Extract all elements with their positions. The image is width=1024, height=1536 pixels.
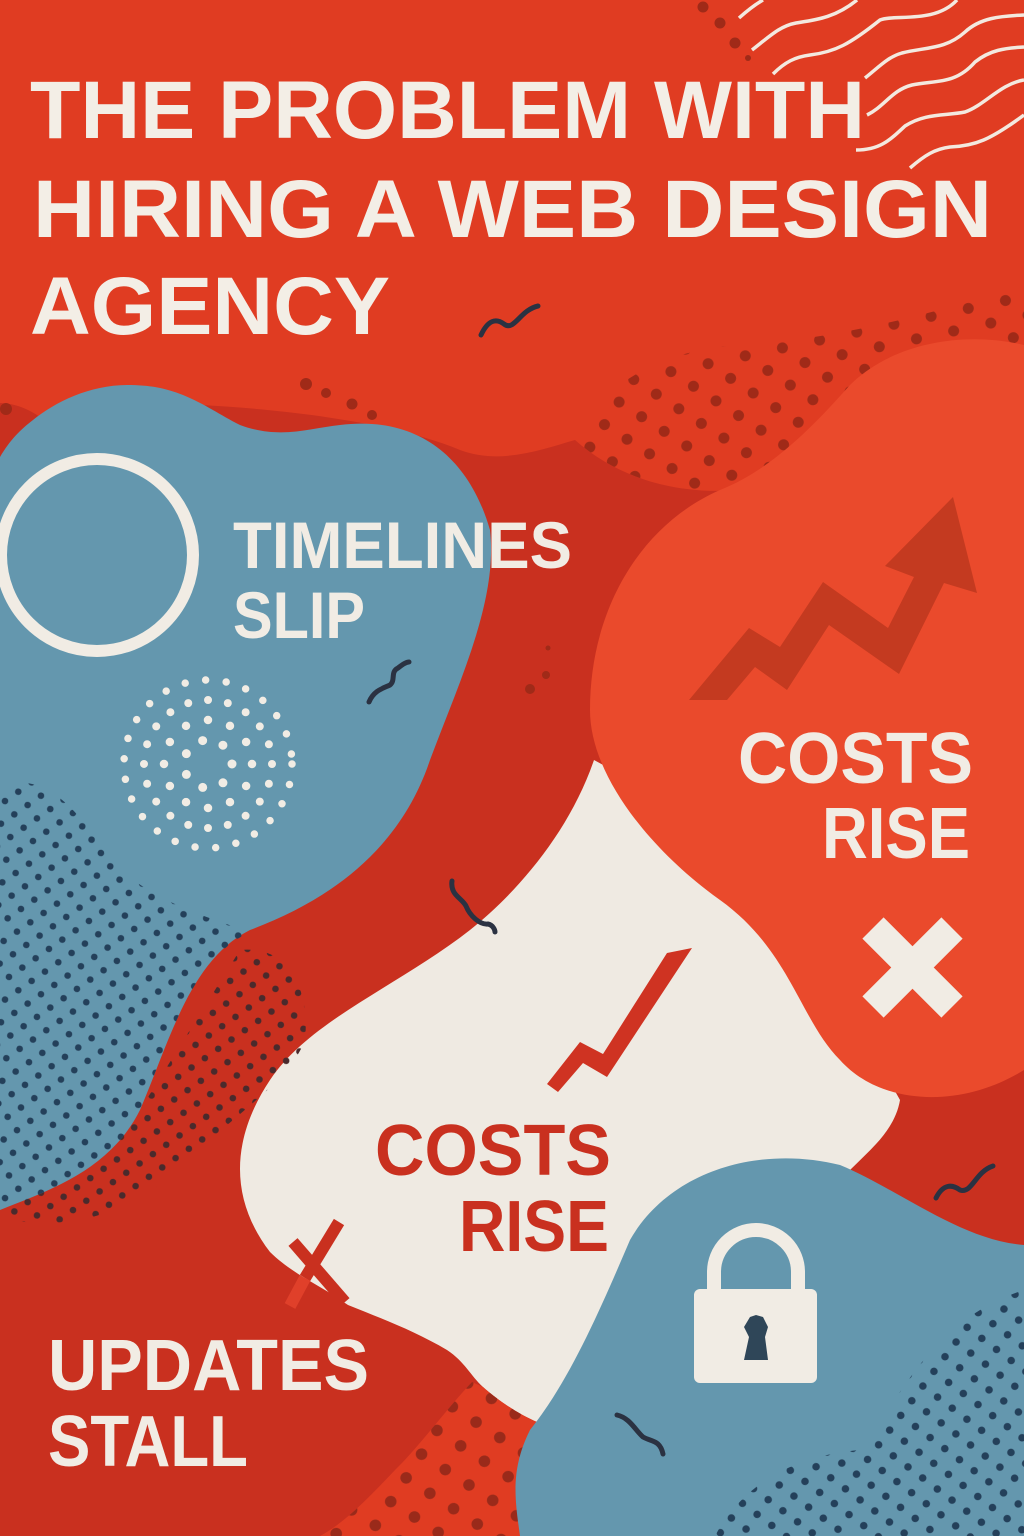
label: timelines slip	[233, 508, 572, 652]
panel: orange blob (costs rise)	[590, 339, 1024, 1097]
label: updates stall: UPDATES	[48, 1326, 369, 1406]
dot sphere	[124, 680, 292, 848]
panel: cream blob (costs rise)	[240, 760, 900, 1422]
dot pattern: blue lower right	[715, 1290, 1024, 1536]
panel: blue blob lower right	[516, 1158, 1024, 1536]
label: timelines slip: TIMELINES	[233, 508, 572, 582]
dot pattern: upper right	[575, 285, 1024, 491]
label: costs rise: RISE	[822, 794, 970, 874]
shape: bottom centre red	[320, 1382, 537, 1536]
icon: padlock	[694, 1230, 817, 1383]
label: costs rise	[375, 1111, 611, 1267]
icon: cross	[873, 928, 952, 1007]
icon: thin red rising line	[547, 948, 692, 1092]
icon: ring	[1, 459, 193, 651]
background: top red shape	[0, 0, 1024, 491]
dot pattern: lower left on red	[0, 950, 306, 1223]
label: timelines slip: SLIP	[233, 578, 365, 652]
label: costs rise: COSTS	[375, 1111, 611, 1191]
dot pattern: bottom centre	[320, 1382, 537, 1536]
icon: red cross	[290, 1222, 345, 1306]
wavy lines: top right	[739, 0, 1024, 168]
icon: rising arrow	[689, 497, 977, 700]
dots: trail near left blob	[0, 378, 377, 420]
title: AGENCY	[30, 261, 390, 352]
squiggles	[369, 306, 993, 1454]
label: costs rise: COSTS	[738, 719, 973, 799]
title: HIRING A WEB DESIGN	[33, 164, 992, 255]
label: updates stall	[48, 1326, 369, 1482]
dot pattern: blue lower left	[0, 782, 250, 1210]
dots: trail at top right	[698, 2, 751, 61]
panel: blue blob (timelines slip)	[0, 385, 572, 1210]
title	[30, 65, 992, 352]
label: updates stall: STALL	[48, 1402, 248, 1482]
title: THE PROBLEM WITH	[30, 65, 865, 156]
label: costs rise: RISE	[459, 1187, 609, 1267]
small dots centre	[525, 646, 550, 694]
label: costs rise	[738, 719, 973, 874]
